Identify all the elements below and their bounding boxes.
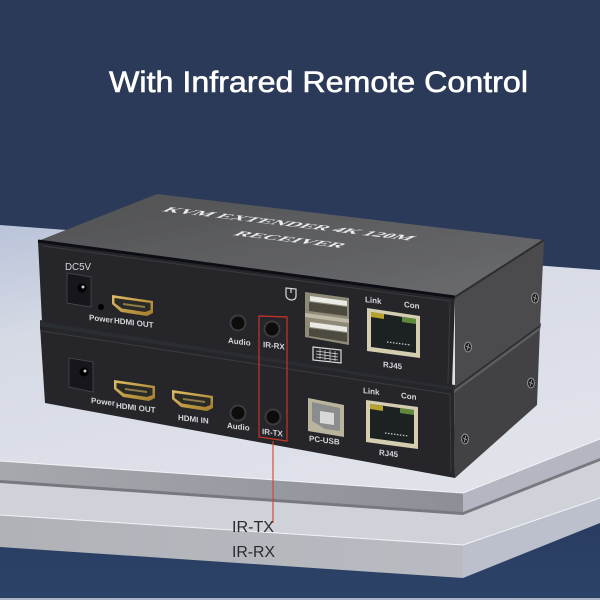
lower labels: HDMI IN: [178, 413, 209, 426]
power LED: [98, 304, 104, 310]
upper labels: IR-RX: [263, 340, 285, 352]
lower labels: IR-TX: [262, 427, 284, 439]
top face print: [158, 206, 420, 249]
IR-RX jack: [264, 320, 280, 338]
upper labels: RJ45: [383, 360, 403, 371]
lower labels: Audio: [227, 421, 250, 433]
lower labels: RJ45: [379, 448, 399, 459]
RJ45 port upper: [367, 308, 420, 358]
DC jack upper: [67, 273, 91, 307]
audio jack lower: [230, 404, 246, 422]
lower labels: Link: [363, 386, 380, 397]
USB ports: [305, 292, 349, 345]
upper labels: Con: [404, 300, 420, 311]
label: IR-RX: IR-RX: [232, 544, 275, 561]
icon: keyboard: [313, 347, 341, 363]
title: With Infrared Remote Control: [109, 66, 528, 99]
device stack: [38, 194, 544, 478]
upper labels: HDMI OUT: [114, 316, 154, 330]
upper labels: DC5V: [65, 262, 91, 273]
HDMI OUT port lower: [114, 380, 155, 401]
arrow: red leader line: [272, 441, 274, 523]
callout: red highlight box: [259, 316, 287, 441]
screws lower: [461, 378, 535, 444]
lower labels: [91, 386, 417, 459]
lower unit: transmitter: [40, 326, 540, 478]
audio jack upper: [230, 314, 246, 332]
HDMI OUT port upper: [112, 295, 153, 316]
upper labels: [65, 262, 420, 371]
PC-USB port: [308, 398, 344, 437]
lower labels: Power: [91, 396, 115, 408]
upper unit: receiver: [38, 194, 544, 387]
upper labels: Link: [365, 295, 382, 306]
table: stacked slabs: [0, 225, 600, 600]
lower labels: HDMI OUT: [116, 401, 156, 415]
lower labels: Con: [401, 391, 417, 402]
upper labels: Power: [89, 313, 113, 325]
IR-TX jack: [264, 408, 282, 426]
DC jack lower: [69, 358, 93, 392]
screws upper: [464, 292, 539, 352]
lower labels: PC-USB: [309, 434, 340, 447]
RJ45 port lower: [366, 400, 418, 449]
upper labels: Audio: [228, 336, 251, 348]
seam between units: [40, 320, 541, 394]
top face print: KVM EXTENDER 4K 120M: [158, 206, 420, 242]
icon: mouse: [286, 288, 296, 300]
HDMI IN port: [172, 390, 213, 411]
label: IR-TX: IR-TX: [232, 519, 274, 536]
top face print: RECEIVER: [229, 230, 353, 249]
